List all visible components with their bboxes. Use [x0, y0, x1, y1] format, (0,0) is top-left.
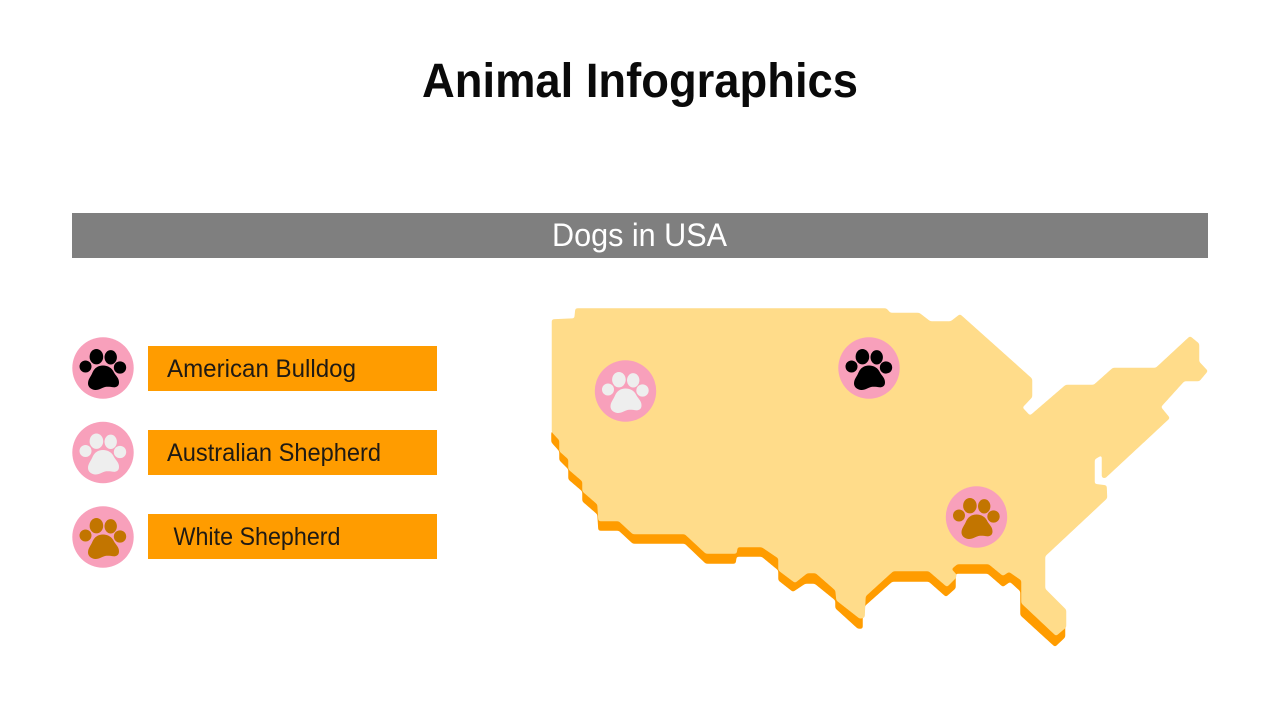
label: American Bulldog: American Bulldog	[167, 355, 356, 383]
icon: white paw badge	[72, 422, 134, 483]
label: American Bulldog	[148, 346, 437, 391]
banner: Dogs in USA	[72, 213, 1208, 258]
icon: brown paw badge	[72, 506, 134, 568]
label: Australian Shepherd: Australian Shepherd	[167, 439, 381, 467]
marker: brown paw in the southeast	[946, 486, 1007, 548]
label: Australian Shepherd	[148, 430, 437, 475]
label: White Shepherd	[148, 514, 437, 559]
legend item: American Bulldog	[72, 337, 437, 399]
legend	[72, 337, 437, 568]
title: Animal Infographics	[422, 55, 858, 108]
legend item: Australian Shepherd	[72, 422, 437, 483]
icon: black paw badge	[72, 337, 134, 399]
USA map	[552, 309, 1207, 646]
label: White Shepherd: White Shepherd	[174, 523, 340, 551]
marker: black paw in the north	[838, 337, 900, 399]
legend item: White Shepherd	[72, 506, 437, 568]
map land	[552, 309, 1207, 635]
banner: Dogs in USA: Dogs in USA	[552, 217, 728, 253]
map shadow	[552, 432, 1064, 646]
marker: white paw in the west	[595, 360, 656, 422]
